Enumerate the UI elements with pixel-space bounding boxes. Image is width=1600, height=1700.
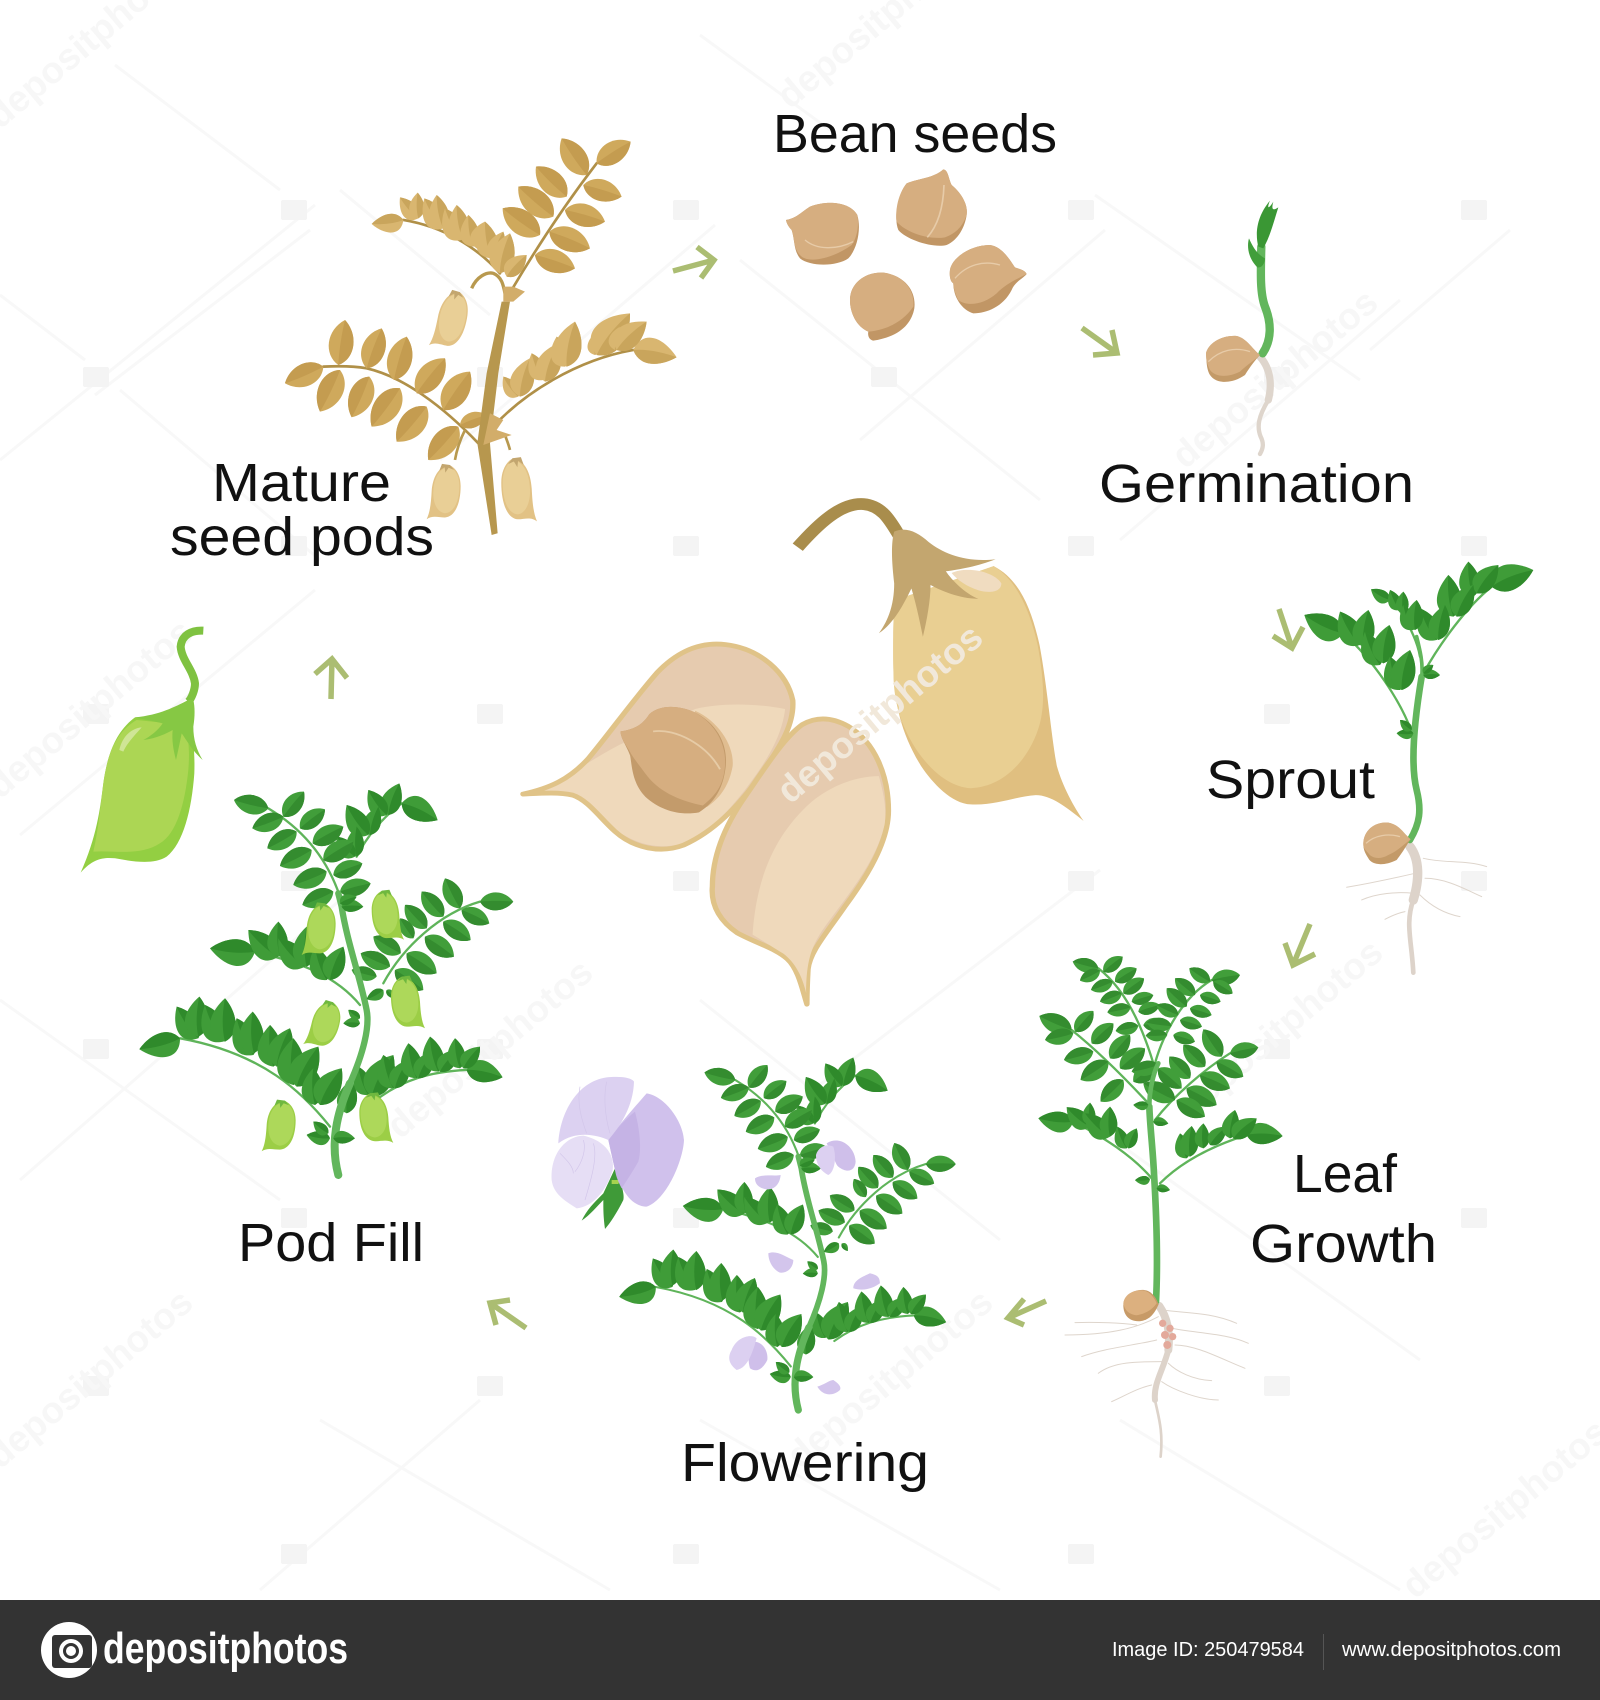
stage: leaf growth plant [1035, 951, 1283, 1457]
seed 2 [896, 169, 967, 246]
stage: flowering plant [617, 1054, 956, 1410]
arrow: pod fill to mature [315, 659, 347, 699]
watermark: text: depositphotos [1169, 931, 1390, 1126]
large green pod detail [81, 631, 203, 873]
stage: sprout [1298, 556, 1537, 973]
seed 4 [950, 245, 1027, 313]
watermark: text: depositphotos [779, 1281, 1000, 1476]
label: leaf growth: Growth [1250, 1214, 1437, 1274]
label: mature seed pods: Mature [212, 453, 391, 513]
flowering plant leaves [617, 1054, 956, 1410]
arrow: germination to sprout [1273, 609, 1303, 648]
center: second open pod half [712, 719, 888, 1004]
label: flowering: Flowering [681, 1433, 929, 1493]
footer image id: Image ID: 250479584 [1112, 1639, 1304, 1661]
label: bean seeds: Bean seeds [773, 104, 1057, 164]
center: closed mature pod [798, 504, 1084, 821]
arrow: mature to seeds [673, 247, 714, 278]
label: sprout: Sprout [1206, 750, 1375, 810]
pod fill plant leaves [137, 780, 513, 1175]
watermark: text: depositphotos [1164, 281, 1385, 476]
arrow: seeds to germination [1082, 328, 1117, 355]
green pods on plant [262, 890, 425, 1151]
watermark: text: depositphotos [379, 951, 600, 1146]
label: leaf growth: Leaf [1293, 1144, 1398, 1204]
arrow: flowering to pod fill [490, 1300, 526, 1328]
arrow: sprout to leaf growth [1285, 924, 1315, 965]
label: mature seed pods: seed pods [170, 507, 434, 567]
seed 1 [786, 203, 859, 265]
big flower detail [552, 1077, 684, 1229]
label: germination: Germination [1099, 454, 1414, 514]
footer bar [0, 1600, 1600, 1700]
watermark: camera stamps [83, 200, 1487, 1564]
small flowers on plant [729, 1141, 880, 1394]
label: pod fill: Pod Fill [238, 1213, 424, 1273]
stage: mature seed pods plant [281, 132, 679, 535]
seed 3 [850, 273, 915, 341]
stage: pod fill plant [137, 780, 513, 1175]
footer url: www.depositphotos.com [1341, 1639, 1561, 1661]
watermark over center pods: depositphotos [769, 616, 990, 811]
stage: bean seeds [786, 169, 1027, 341]
center: open pod half with seed [523, 644, 793, 849]
icon: depositphotos camera logo [41, 1622, 97, 1678]
arrow: leaf growth to flowering [1008, 1299, 1046, 1325]
stage: germination sprout [1206, 201, 1278, 454]
footer brand name: depositphotos [103, 1624, 348, 1673]
